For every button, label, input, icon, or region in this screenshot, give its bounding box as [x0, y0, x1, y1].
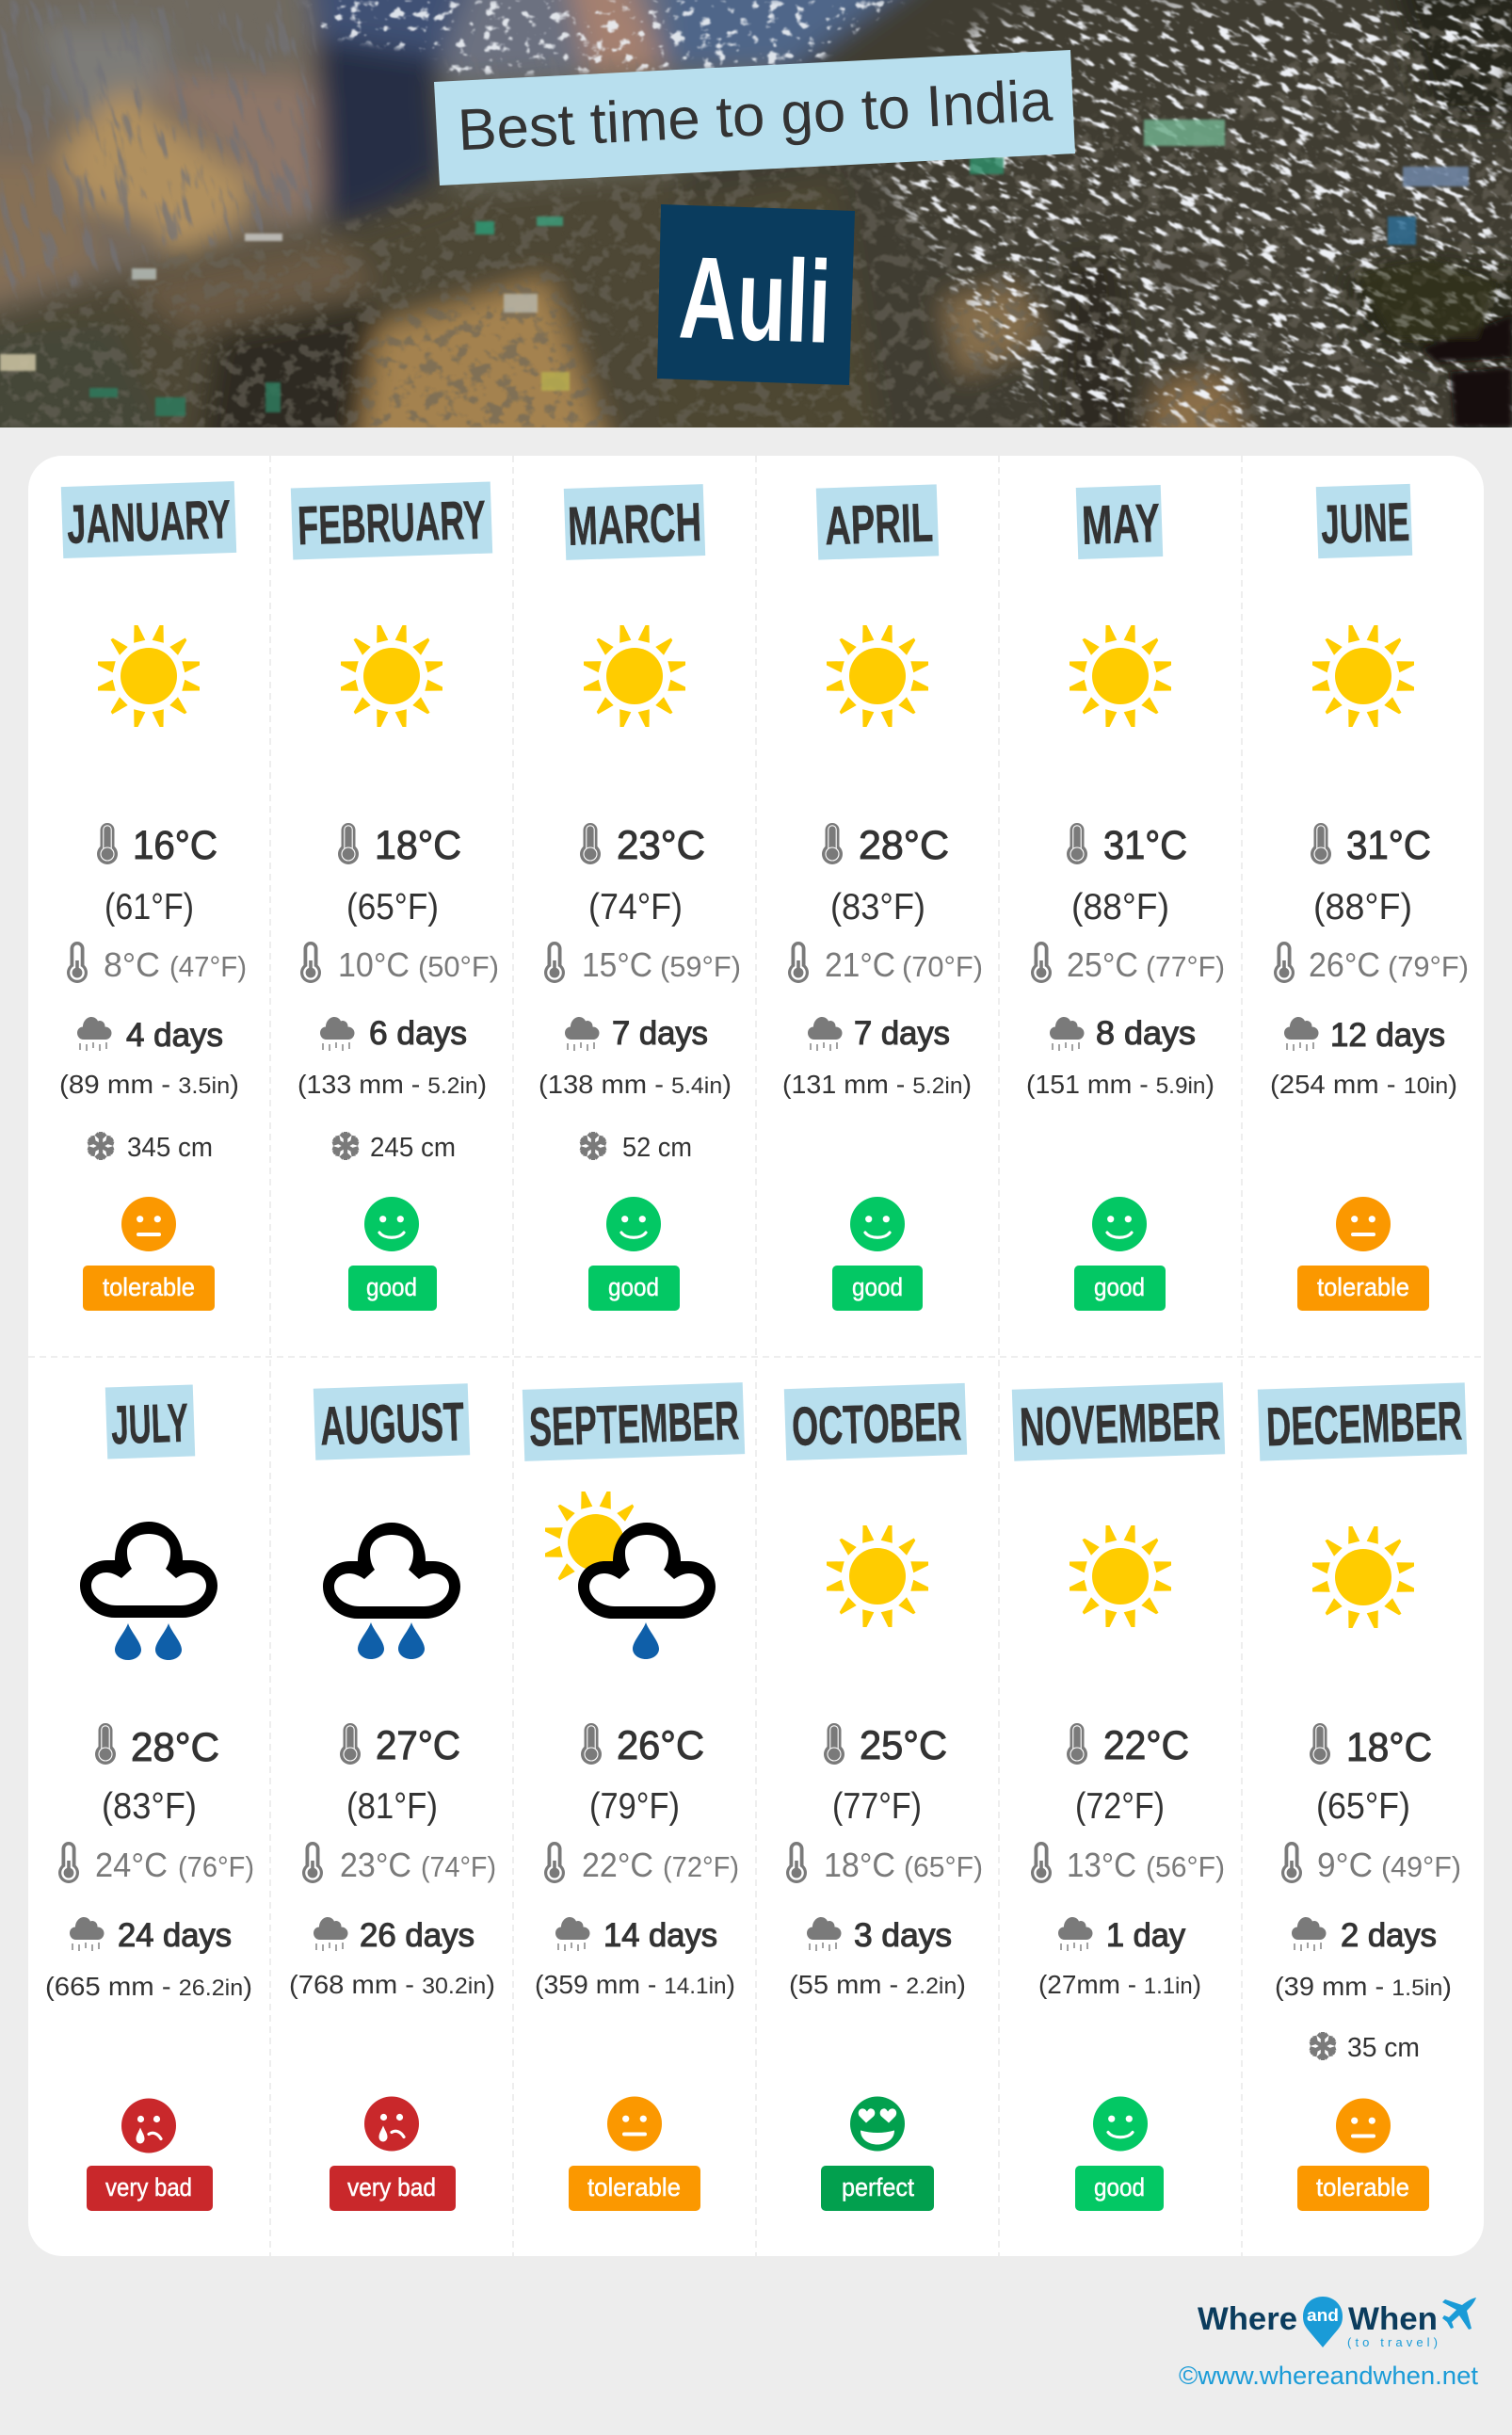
panel: December — [1258, 1382, 1467, 2211]
rainfall — [298, 1015, 487, 1099]
rainfall: 3 days — [854, 1917, 952, 1954]
high temperature: 26°C — [617, 1723, 704, 1768]
snowfall — [331, 1132, 456, 1163]
rating: tolerable — [569, 2096, 700, 2211]
panel: April — [782, 484, 983, 1311]
icon: sun — [1312, 625, 1414, 727]
rainfall — [1275, 1917, 1452, 2001]
panel: September — [523, 1382, 745, 2211]
rating: tolerable: tolerable — [103, 1273, 195, 1301]
low temperature: (56°F) — [1146, 1850, 1225, 1883]
high temperature: (65°F) — [346, 887, 439, 927]
rainfall — [1026, 1015, 1214, 1099]
rating: tolerable — [1297, 2098, 1429, 2211]
panel: October — [784, 1383, 983, 2211]
high temperature: (81°F) — [346, 1786, 438, 1827]
rating: good: good — [1094, 1273, 1145, 1301]
rainfall: (359 mm - 14.1in) — [535, 1970, 735, 1999]
rainfall: 6 days — [369, 1015, 467, 1052]
icon: sun — [98, 625, 200, 727]
rating: very bad: very bad — [105, 2173, 192, 2201]
low temperature: 15°C — [582, 945, 652, 984]
low temperature — [1031, 1842, 1225, 1884]
snowfall: 245 cm — [370, 1133, 456, 1163]
month label — [61, 481, 236, 558]
rainfall: (768 mm - 30.2in) — [289, 1970, 495, 1999]
month label — [1012, 1382, 1225, 1461]
low temperature: (47°F) — [169, 950, 247, 983]
rainfall: (133 mm - 5.2in) — [298, 1070, 487, 1099]
rainfall: 8 days — [1096, 1015, 1196, 1052]
rating: tolerable — [83, 1197, 215, 1311]
high temperature: (77°F) — [832, 1786, 922, 1827]
rainfall: 26 days — [360, 1917, 475, 1954]
rainfall: (138 mm - 5.4in) — [539, 1070, 732, 1099]
low temperature — [300, 942, 499, 984]
high temperature: (65°F) — [1316, 1786, 1410, 1827]
high temperature — [824, 1723, 947, 1827]
month label: MAY — [1081, 492, 1161, 556]
icon: sun — [1312, 1526, 1414, 1628]
panel: November — [1012, 1382, 1225, 2211]
high temperature — [340, 1723, 460, 1827]
rating: good: good — [608, 1273, 659, 1301]
rainfall — [1038, 1917, 1201, 1999]
rating: very bad: very bad — [347, 2173, 436, 2201]
high temperature: 28°C — [859, 823, 949, 868]
rainfall: 24 days — [118, 1917, 232, 1954]
panel: June — [1270, 484, 1469, 1311]
title banner — [434, 50, 1075, 185]
rating: tolerable — [1297, 1197, 1429, 1311]
high temperature — [95, 1723, 219, 1827]
month label: MARCH — [567, 492, 702, 557]
rainfall: 1 day — [1106, 1917, 1185, 1954]
high temperature: 23°C — [617, 823, 705, 868]
rating: tolerable: tolerable — [587, 2173, 681, 2201]
rainfall: (665 mm - 26.2in) — [45, 1972, 252, 2001]
high temperature: 18°C — [375, 823, 461, 868]
high temperature: 28°C — [131, 1725, 219, 1770]
footer logo: Where and When: (to travel) — [1347, 2335, 1438, 2349]
month label: JULY — [110, 1393, 189, 1456]
month label — [1316, 484, 1412, 558]
panel: February — [291, 482, 499, 1311]
low temperature: (72°F) — [663, 1850, 739, 1883]
low temperature — [302, 1842, 496, 1884]
photo texture — [0, 0, 638, 296]
low temperature — [1274, 942, 1469, 984]
rainfall — [782, 1015, 972, 1099]
panel: March — [539, 484, 741, 1311]
month label: AUGUST — [319, 1391, 465, 1458]
low temperature: (74°F) — [421, 1850, 496, 1883]
header photo: Auli mountain village with snow — [0, 0, 1512, 427]
high temperature — [822, 823, 949, 927]
icon: sun — [584, 625, 685, 727]
high temperature — [1310, 1723, 1432, 1827]
low temperature — [544, 1842, 739, 1884]
footer logo: Where and When: When — [1348, 2301, 1438, 2337]
low temperature: (70°F) — [902, 950, 983, 983]
high temperature: (72°F) — [1075, 1786, 1165, 1827]
low temperature: (79°F) — [1388, 950, 1469, 983]
rainfall: (151 mm - 5.9in) — [1026, 1070, 1214, 1099]
month label — [105, 1384, 195, 1459]
low temperature: 13°C — [1067, 1846, 1136, 1884]
month label: OCTOBER — [791, 1391, 962, 1458]
low temperature — [67, 942, 247, 984]
month label: APRIL — [824, 492, 934, 556]
high temperature — [338, 823, 461, 927]
month label — [314, 1383, 470, 1460]
rating: good: good — [852, 1273, 903, 1301]
city name: Auli: Auli — [677, 233, 833, 368]
icon: rain cloud with two drops — [323, 1523, 460, 1659]
low temperature — [788, 942, 983, 984]
high temperature — [1067, 1723, 1189, 1827]
rainfall — [535, 1917, 735, 1999]
low temperature: 8°C — [104, 945, 160, 984]
rainfall: (131 mm - 5.2in) — [782, 1070, 972, 1099]
city name: Auli — [657, 204, 855, 385]
snowfall — [87, 1132, 213, 1163]
high temperature: 16°C — [133, 823, 217, 868]
icon: sun — [341, 625, 442, 727]
rating: perfect: perfect — [842, 2173, 914, 2201]
rainfall — [59, 1017, 239, 1099]
month label — [291, 482, 492, 559]
low temperature: (65°F) — [904, 1850, 983, 1883]
rating: very bad — [87, 2098, 213, 2211]
footer logo: Where and When: and — [1307, 2306, 1339, 2325]
icon: sun — [1070, 1525, 1171, 1627]
icon: sun — [827, 1525, 928, 1627]
low temperature — [1281, 1842, 1461, 1884]
high temperature: (61°F) — [105, 887, 194, 927]
high temperature: 25°C — [860, 1723, 947, 1768]
low temperature: 9°C — [1317, 1846, 1373, 1884]
icon: sun — [1070, 625, 1171, 727]
low temperature: 21°C — [825, 945, 895, 984]
low temperature: (77°F) — [1146, 950, 1225, 983]
rainfall: (254 mm - 10in) — [1270, 1070, 1457, 1099]
high temperature — [97, 823, 217, 927]
rating: good — [1075, 2096, 1164, 2211]
high temperature: 18°C — [1346, 1725, 1432, 1770]
low temperature: (76°F) — [178, 1850, 254, 1883]
low temperature: 23°C — [340, 1846, 411, 1884]
panel: August — [289, 1383, 496, 2211]
month label — [564, 484, 705, 560]
month label: JANUARY — [66, 489, 232, 556]
main calendar card — [28, 456, 1484, 2256]
month label: JUNE — [1320, 492, 1410, 556]
rainfall: (27mm - 1.1in) — [1038, 1970, 1201, 1999]
low temperature: 22°C — [582, 1846, 653, 1884]
high temperature — [581, 1723, 704, 1827]
low temperature: 18°C — [824, 1846, 895, 1884]
month label — [523, 1382, 745, 1461]
rating: very bad — [330, 2096, 456, 2211]
high temperature — [580, 823, 705, 927]
high temperature — [1311, 823, 1431, 927]
month label — [784, 1383, 967, 1460]
rating: good: good — [366, 1273, 417, 1301]
snowfall: 345 cm — [127, 1133, 213, 1163]
footer logo: Where and When: Where — [1198, 2301, 1297, 2337]
low temperature: (59°F) — [660, 950, 741, 983]
panel: July — [45, 1384, 254, 2211]
rating: good — [588, 1197, 680, 1311]
month label: SEPTEMBER — [528, 1390, 740, 1459]
month label — [1076, 485, 1163, 559]
high temperature: (83°F) — [830, 887, 925, 927]
low temperature — [1031, 942, 1225, 984]
high temperature: 31°C — [1346, 823, 1431, 868]
snowfall — [1309, 2032, 1420, 2063]
rating: good — [832, 1197, 923, 1311]
title banner: Best time to go to India — [457, 69, 1054, 163]
rainfall — [289, 1917, 495, 1999]
snowfall: 52 cm — [622, 1133, 692, 1163]
snowfall: 35 cm — [1347, 2033, 1420, 2063]
low temperature: 26°C — [1309, 945, 1380, 984]
rating: good — [1074, 1197, 1166, 1311]
low temperature — [58, 1842, 254, 1884]
high temperature: 31°C — [1103, 823, 1187, 868]
icon: sun behind rain cloud — [545, 1492, 716, 1659]
icon: sun — [827, 625, 928, 727]
rainfall — [45, 1917, 252, 2001]
high temperature: (83°F) — [102, 1786, 197, 1827]
high temperature: (88°F) — [1071, 887, 1169, 927]
rainfall — [539, 1015, 732, 1099]
low temperature: (49°F) — [1381, 1850, 1461, 1883]
rainfall — [789, 1917, 966, 1999]
icon: map pin — [1303, 2297, 1343, 2347]
panel: May — [1026, 485, 1225, 1311]
high temperature: 27°C — [376, 1723, 460, 1768]
rainfall: 7 days — [854, 1015, 950, 1052]
rainfall — [1270, 1017, 1457, 1099]
footer logo: Where and When — [1198, 2297, 1476, 2349]
low temperature: 10°C — [338, 945, 410, 984]
high temperature: (74°F) — [588, 887, 683, 927]
rainfall: 12 days — [1330, 1017, 1445, 1054]
rainfall: 2 days — [1341, 1917, 1437, 1954]
month label — [816, 484, 939, 560]
rating: tolerable: tolerable — [1316, 2173, 1409, 2201]
high temperature: 22°C — [1103, 1723, 1189, 1768]
rainfall: (55 mm - 2.2in) — [789, 1970, 966, 1999]
icon: rain cloud with two drops — [80, 1522, 217, 1660]
month label: FEBRUARY — [297, 490, 487, 556]
rating: good: good — [1094, 2173, 1145, 2201]
rainfall: 7 days — [612, 1015, 708, 1052]
high temperature — [1067, 823, 1187, 927]
low temperature — [786, 1842, 983, 1884]
low temperature: (50°F) — [418, 950, 499, 983]
low temperature: 25°C — [1067, 945, 1138, 984]
icon: plane — [1442, 2298, 1476, 2330]
rainfall: 14 days — [603, 1917, 717, 1954]
low temperature: 24°C — [95, 1846, 168, 1884]
rating: perfect — [821, 2096, 934, 2211]
panel: January — [59, 481, 247, 1311]
month label: NOVEMBER — [1019, 1390, 1221, 1458]
high temperature: (88°F) — [1313, 887, 1412, 927]
high temperature: (79°F) — [589, 1786, 680, 1827]
snowfall — [579, 1132, 692, 1163]
rating: tolerable: tolerable — [1317, 1273, 1409, 1301]
rating: good — [348, 1197, 437, 1311]
rainfall: (39 mm - 1.5in) — [1275, 1972, 1452, 2001]
copyright url: ©www.whereandwhen.net — [1179, 2362, 1478, 2390]
low temperature — [544, 942, 741, 984]
rainfall: (89 mm - 3.5in) — [59, 1070, 239, 1099]
rainfall: 4 days — [126, 1017, 223, 1054]
